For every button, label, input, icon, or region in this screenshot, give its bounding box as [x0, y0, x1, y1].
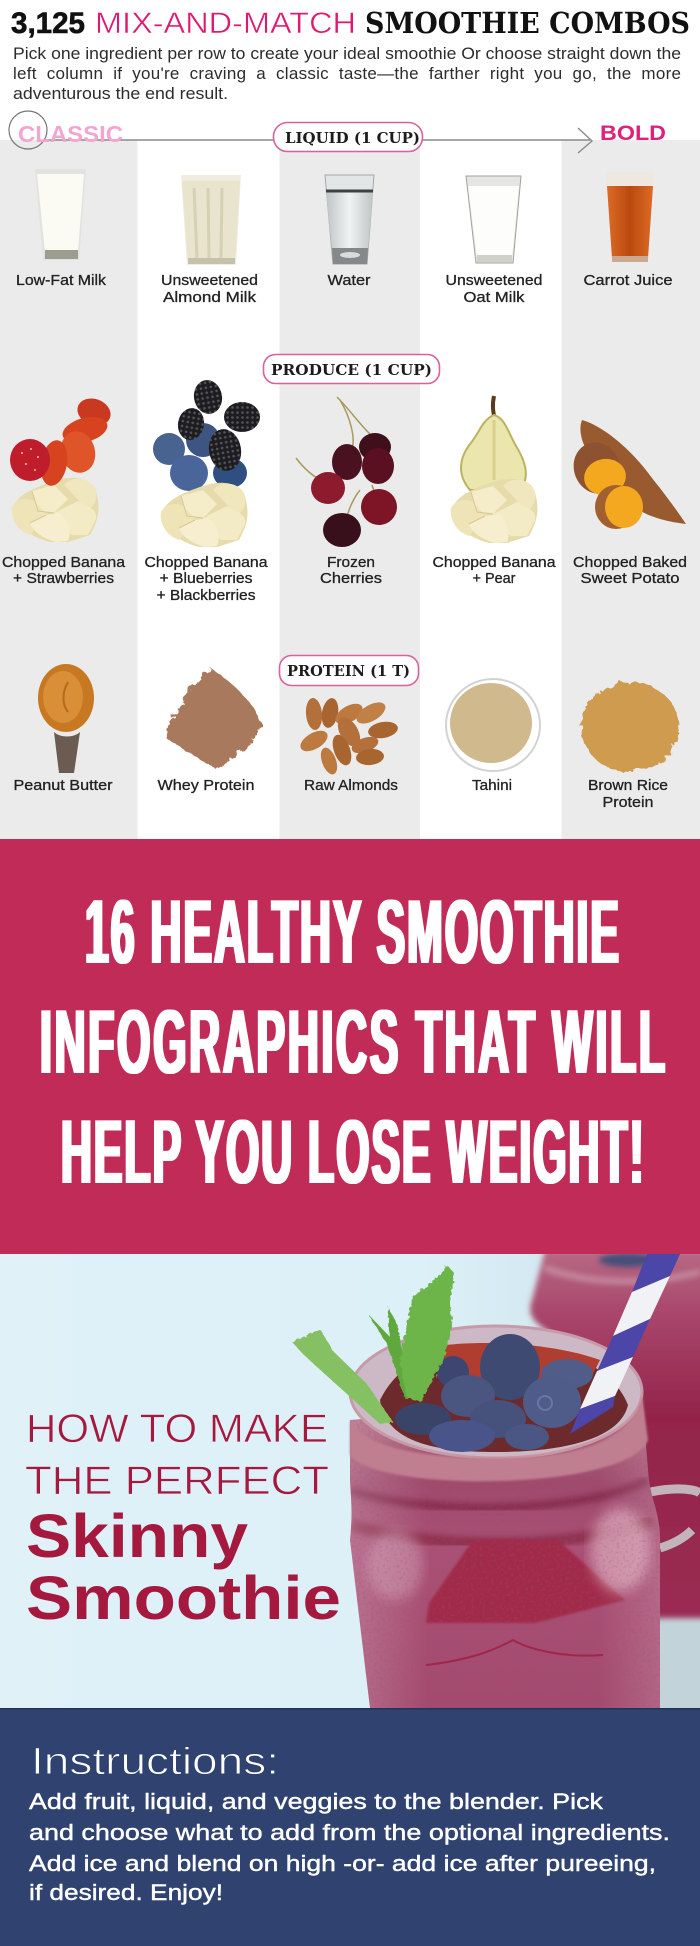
labels: produce row: Chopped Banana [144, 554, 268, 571]
labels: produce row: + Blueberries [160, 570, 252, 587]
labels: protein row: Raw Almonds [304, 777, 398, 794]
labels: liquid row: Carrot Juice [584, 272, 672, 289]
labels: protein row: Peanut Butter [14, 777, 112, 794]
spectrum arrow line [45, 128, 592, 153]
instructions body: Add fruit, liquid, and veggies to the blender. Pick [29, 1789, 604, 1814]
mint leaves [292, 1266, 455, 1424]
headline line 1: 16 HEALTHY SMOOTHIE [85, 882, 619, 983]
main jar [350, 1326, 700, 1710]
heading line 4: Smoothie [26, 1564, 341, 1632]
panel: smoothie photo [0, 1250, 700, 1710]
icon: banana and strawberries [10, 394, 114, 542]
labels: protein row: Whey Protein [158, 777, 254, 794]
pill: liquid [274, 122, 422, 152]
icon: raw almonds [297, 697, 399, 777]
blueberries [395, 1334, 593, 1452]
icon: tahini bowl [446, 679, 540, 771]
page background [0, 0, 700, 839]
panel background [0, 1708, 700, 1946]
labels: produce row: Cherries [320, 570, 382, 587]
icon: circle around classic [9, 111, 47, 149]
headline line 3: HELP YOU LOSE WEIGHT! [61, 1102, 644, 1203]
pill: protein [280, 656, 418, 686]
band background [0, 839, 700, 1254]
glass rim back [350, 1326, 642, 1458]
intro paragraph [13, 44, 681, 103]
glass: oat milk [466, 176, 521, 263]
labels: produce row: Sweet Potato [580, 570, 680, 587]
pill: produce: PRODUCE (1 CUP) [271, 361, 432, 379]
icon: brown rice protein pile [581, 682, 679, 772]
instructions heading: Instructions: [31, 1741, 279, 1783]
photo background [0, 1254, 548, 1708]
jar bands and contents [350, 1419, 660, 1708]
surface lower right [660, 1618, 700, 1708]
labels: produce row: Chopped Banana [432, 554, 556, 571]
instructions body: if desired. Enjoy! [29, 1880, 223, 1905]
glass: water [325, 175, 374, 264]
column stripes [0, 140, 700, 839]
labels: produce row [2, 554, 687, 604]
labels: liquid row: Oat Milk [464, 289, 525, 306]
icon: banana and pear [451, 396, 537, 543]
glass: low-fat milk [35, 169, 86, 260]
labels: produce row: Chopped Baked [573, 554, 687, 571]
title: MIX-AND-MATCH [95, 7, 356, 40]
labels: produce row: Chopped Banana [2, 554, 126, 571]
labels: liquid row: Unsweetened [161, 272, 258, 289]
pill: liquid: LIQUID (1 CUP) [285, 129, 420, 147]
labels: liquid row: Almond Milk [163, 289, 257, 306]
glass: almond milk [181, 175, 241, 265]
labels: protein row [14, 777, 668, 811]
labels: protein row: Brown Rice [588, 777, 668, 794]
title [11, 6, 690, 40]
labels: produce row: + Pear [472, 570, 516, 587]
headline line 2: INFOGRAPHICS THAT WILL [40, 992, 665, 1093]
heading line 1: HOW TO MAKE [26, 1407, 328, 1451]
panel top edge [0, 1708, 700, 1710]
intro paragraph: Pick one ingredient per row to create your ideal smoothie Or choose straight down the [13, 44, 681, 63]
smoothie surface [380, 1368, 628, 1452]
panel: ingredient chart [0, 0, 700, 839]
photo heading [25, 1407, 341, 1632]
heading line 2: THE PERFECT [25, 1459, 329, 1503]
icon: whey protein pile [166, 669, 261, 769]
glass front lip [350, 1395, 648, 1481]
instructions body: and choose what to add from the optional ingredients. [29, 1820, 670, 1845]
labels: protein row: Protein [602, 794, 654, 811]
panel: instructions [0, 1708, 700, 1946]
heading line 3: Skinny [26, 1502, 248, 1570]
labels: liquid row [16, 272, 672, 306]
labels: protein row: Tahini [472, 777, 512, 794]
icon: sweet potato [566, 420, 686, 529]
panel: headline band [0, 839, 700, 1254]
labels: produce row: + Blackberries [156, 587, 256, 604]
labels: liquid row: Water [328, 272, 370, 289]
glass: carrot juice [606, 172, 654, 262]
instructions body [29, 1789, 670, 1905]
background jar [530, 1250, 700, 1618]
title: 3,125 [11, 7, 85, 40]
intro paragraph: adventurous the end result. [13, 84, 228, 103]
labels: liquid row: Low-Fat Milk [16, 272, 107, 289]
icon: cherries [296, 397, 397, 547]
label: classic: CLASSIC [18, 121, 123, 147]
straw [570, 1254, 680, 1434]
instructions body: Add ice and blend on high -or- add ice after pureeing, [29, 1851, 656, 1876]
jar handle [650, 1489, 700, 1548]
labels: produce row: + Strawberries [13, 570, 114, 587]
pill: protein: PROTEIN (1 T) [287, 662, 410, 680]
labels: liquid row: Unsweetened [446, 272, 542, 289]
jar body [350, 1395, 660, 1708]
icon: peanut butter spoon [38, 664, 94, 773]
labels: produce row: Frozen [327, 554, 375, 571]
pill: produce [264, 354, 440, 384]
label: bold: BOLD [600, 122, 666, 145]
intro paragraph: left column if you're craving a classic taste—the farther right you go, the more [13, 64, 681, 83]
icon: banana and mixed berries [153, 378, 260, 547]
jar mouth [350, 1326, 648, 1481]
